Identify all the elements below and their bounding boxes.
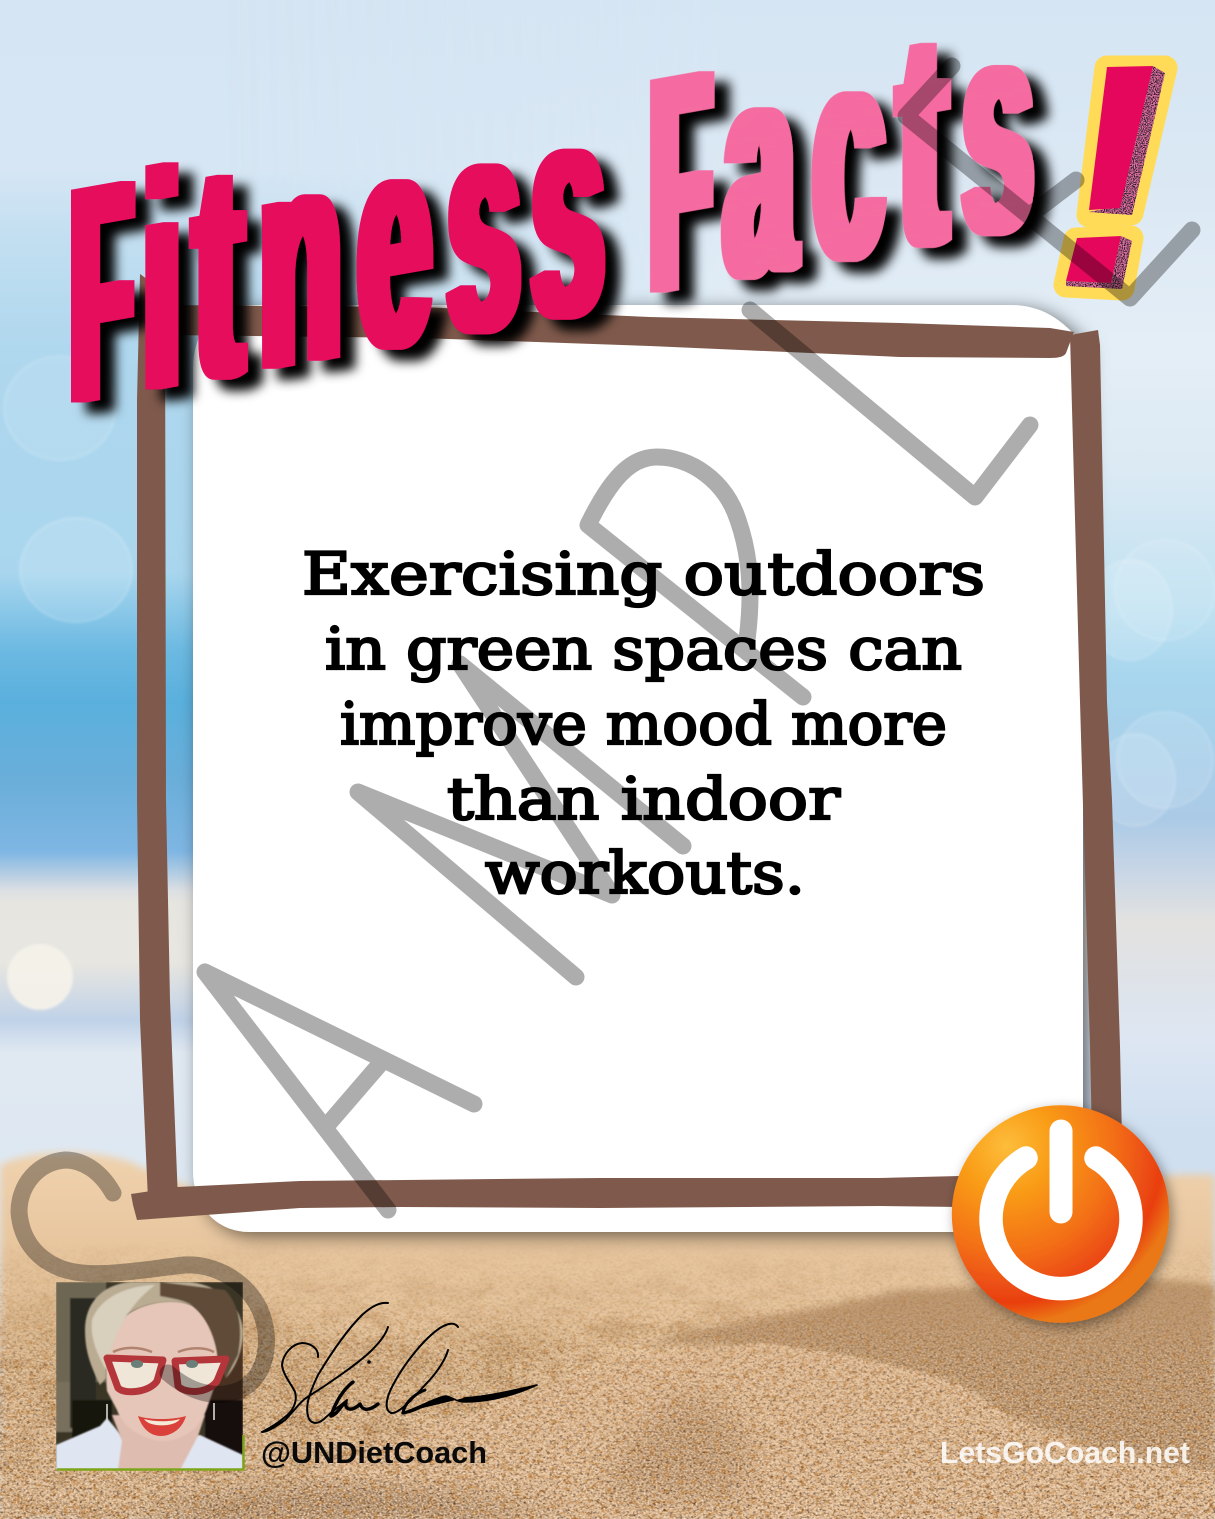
title: Fitness Facts: s xyxy=(532,34,603,386)
neck and chest xyxy=(112,1415,205,1470)
portrait green edge xyxy=(57,1435,244,1470)
exclamation mark icon xyxy=(1066,66,1165,289)
signature: thick letters xyxy=(331,1382,378,1416)
red glasses xyxy=(107,1358,226,1392)
watermark letter P xyxy=(588,457,803,697)
power bar xyxy=(1050,1131,1072,1212)
face xyxy=(106,1301,218,1441)
title: Fitness Facts xyxy=(72,0,1032,468)
signature: l loop xyxy=(387,1324,458,1413)
watermark letter E xyxy=(906,66,1192,298)
signature: i dot xyxy=(367,1360,371,1364)
power button icon xyxy=(952,1105,1169,1323)
title word: Fitness: i xyxy=(144,108,180,455)
signature: S loop xyxy=(262,1327,388,1432)
power ring xyxy=(991,1158,1131,1289)
lips and teeth xyxy=(138,1416,186,1436)
title word: Fitness: n xyxy=(260,80,341,434)
eyes xyxy=(131,1360,143,1368)
portrait photo xyxy=(56,1282,243,1470)
shirt xyxy=(56,1418,243,1470)
signature xyxy=(262,1303,537,1432)
hair xyxy=(85,1282,243,1385)
main fact text xyxy=(302,540,985,907)
title word: Fitness: e xyxy=(359,64,430,417)
white card panel xyxy=(193,305,1083,1232)
signature: h stroke xyxy=(307,1303,388,1423)
website text: LetsGoCoach.net xyxy=(940,1435,1190,1470)
watermark letter A xyxy=(205,972,474,1210)
line 3: improve mood more xyxy=(340,690,947,758)
exclamation yellow outline xyxy=(1066,68,1165,288)
eyebrows xyxy=(113,1348,214,1352)
photo backdrop xyxy=(56,1282,243,1469)
title word: Fitness: s xyxy=(448,48,519,401)
exclamation magenta face xyxy=(1066,66,1153,283)
frame: left post xyxy=(137,274,178,1200)
earrings xyxy=(107,1403,214,1421)
line 1: Exercising outdoors xyxy=(302,540,985,608)
line 2: in green spaces can xyxy=(325,615,962,683)
watermark letter L xyxy=(750,310,1030,497)
frame: top bar xyxy=(165,305,1074,358)
bokeh light circles xyxy=(4,356,1215,826)
title word: Fitness: F xyxy=(72,117,132,468)
frame: bottom bar xyxy=(131,1176,960,1220)
signature: e stroke xyxy=(403,1390,430,1413)
sand dunes xyxy=(0,1140,1215,1519)
line 5: workouts. xyxy=(485,839,805,907)
sky gradient xyxy=(0,193,1215,1112)
exclamation speckled side xyxy=(1066,66,1165,289)
handle text: @UNDietCoach xyxy=(261,1435,487,1470)
title word: Fitness: t xyxy=(195,97,242,446)
hand-drawn brown frame xyxy=(131,274,1122,1220)
frame: right post xyxy=(1070,330,1122,1140)
watermark letter S xyxy=(19,1160,266,1394)
signature: tail xyxy=(402,1385,537,1413)
line 4: than indoor xyxy=(447,765,840,833)
sun glint xyxy=(7,944,73,1010)
watermark letter M xyxy=(358,664,683,977)
